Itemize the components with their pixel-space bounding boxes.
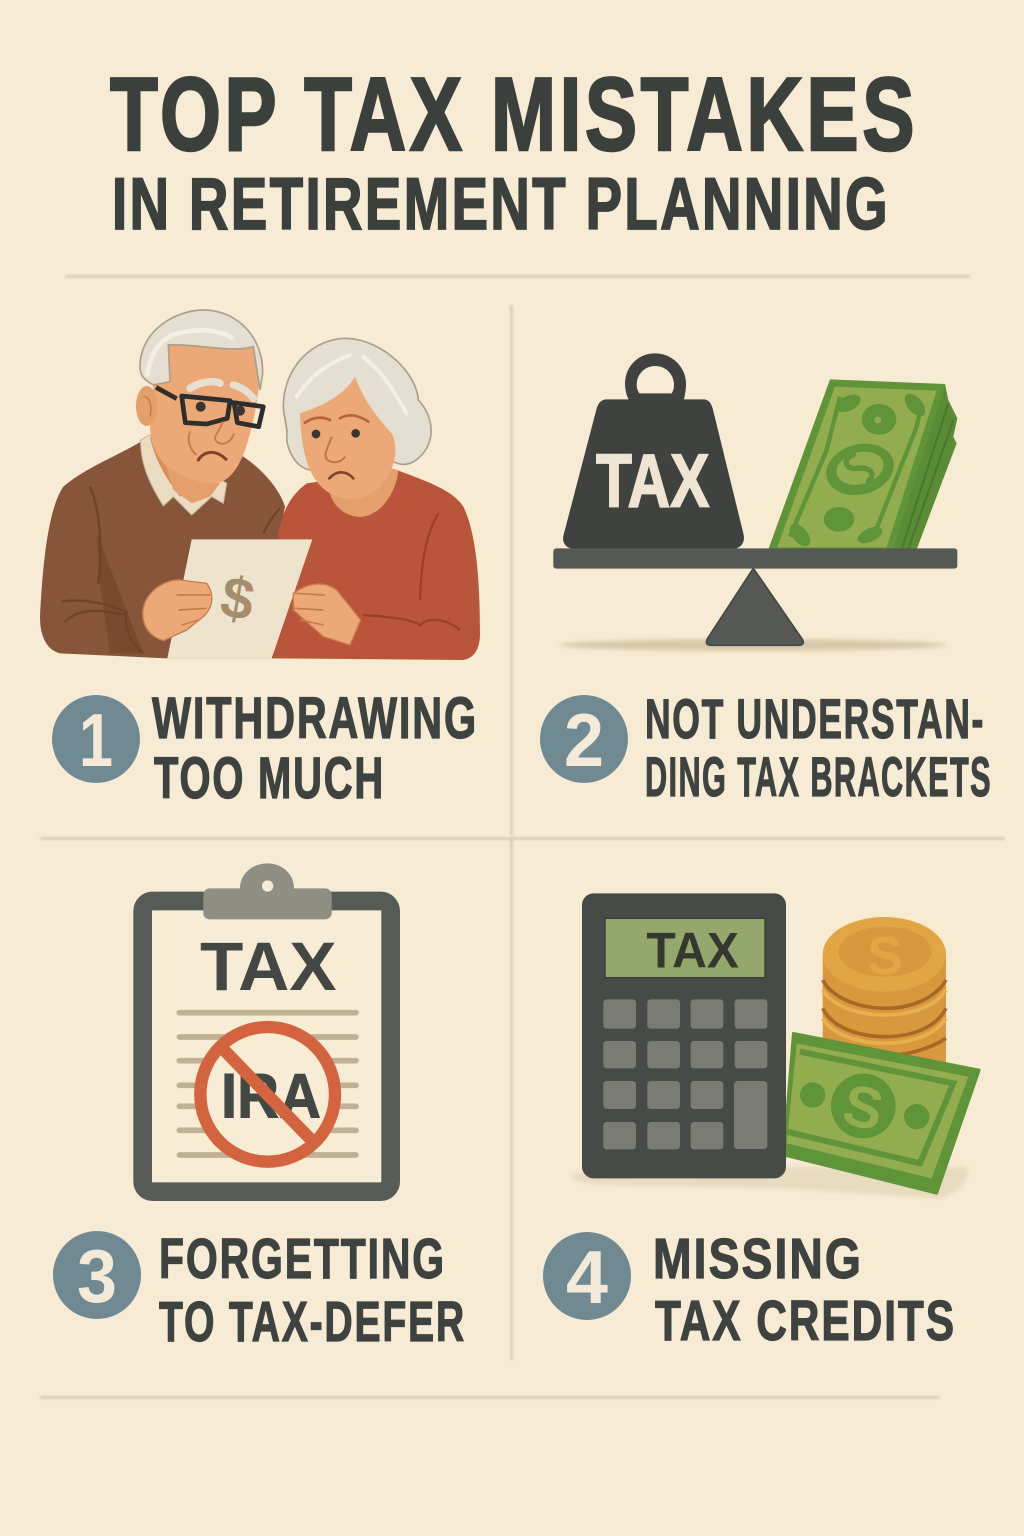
label 1: WITHDRAWING bbox=[152, 686, 478, 751]
man's glasses bbox=[156, 387, 263, 427]
label 1 bbox=[152, 686, 478, 811]
scale fulcrum bbox=[706, 568, 803, 645]
number badge 3 bbox=[53, 1231, 141, 1319]
text lines bbox=[179, 1013, 356, 1155]
panel: not understanding tax brackets bbox=[540, 353, 992, 808]
number badge 4: 4 bbox=[566, 1235, 608, 1319]
man's nose and frown bbox=[215, 422, 234, 444]
woman's hair strands bbox=[297, 355, 407, 413]
coin stack: S bbox=[867, 927, 903, 986]
prohibition circle interior bbox=[201, 1028, 334, 1161]
man's hand bbox=[143, 580, 212, 641]
clipboard board bbox=[143, 901, 391, 1192]
man's neck bbox=[150, 437, 197, 497]
coin stack bbox=[823, 917, 946, 1067]
label 3: FORGETTING bbox=[159, 1227, 446, 1291]
man's collar bbox=[141, 435, 227, 515]
weight body bbox=[563, 399, 744, 549]
calculator body bbox=[582, 893, 786, 1178]
label 2 bbox=[645, 687, 992, 808]
weight ring bbox=[625, 353, 686, 402]
woman's hair bbox=[283, 338, 431, 470]
label 3 bbox=[159, 1227, 466, 1354]
IRA text: IRA bbox=[221, 1062, 321, 1132]
money stack bbox=[887, 384, 957, 549]
illustration: calculator, coins and cash: TAX bbox=[646, 923, 739, 979]
money ornaments bbox=[790, 397, 922, 537]
label 4: MISSING bbox=[653, 1227, 863, 1291]
woman's head bbox=[300, 377, 395, 499]
illustration: tax weight vs money on scale bbox=[553, 353, 957, 651]
banknote bbox=[783, 1033, 979, 1193]
illustration: clipboard with crossed-out IRA bbox=[143, 863, 391, 1192]
weight label: TAX bbox=[596, 439, 709, 523]
illustration: worried couple with bill bbox=[40, 310, 480, 660]
prohibition sign bbox=[200, 1027, 335, 1162]
number badge 2 bbox=[540, 695, 628, 783]
woman's hand bbox=[293, 584, 361, 645]
panel: forgetting to tax-defer bbox=[53, 863, 466, 1354]
woman's sweater bbox=[273, 470, 480, 660]
woman's neck bbox=[330, 467, 398, 517]
calculator screen bbox=[605, 918, 765, 978]
label 4 bbox=[653, 1227, 956, 1353]
number badge 1 bbox=[52, 695, 140, 783]
ground shadow bbox=[570, 1167, 968, 1198]
man's eyebrows bbox=[190, 382, 253, 398]
illustration: worried couple with bill: $ bbox=[216, 564, 259, 634]
number badge 1: 1 bbox=[79, 698, 113, 782]
clipboard clip bbox=[203, 863, 332, 919]
calculator keys bbox=[603, 999, 767, 1149]
banknote: S bbox=[837, 1072, 889, 1144]
label 3: TO TAX-DEFER bbox=[159, 1290, 466, 1354]
illustration: calculator, coins and cash bbox=[570, 893, 979, 1198]
label 1: TOO MUCH bbox=[154, 746, 385, 811]
number badge 2: 2 bbox=[564, 698, 604, 782]
scale shadow bbox=[560, 639, 947, 651]
panel: withdrawing too much bbox=[40, 310, 480, 811]
man's sweater bbox=[40, 440, 285, 658]
number badge 3: 3 bbox=[77, 1234, 117, 1318]
man's head bbox=[150, 343, 259, 483]
clipboard heading: TAX bbox=[200, 929, 337, 1005]
title bbox=[110, 57, 918, 245]
bill with dollar sign bbox=[167, 539, 312, 658]
number badge 4 bbox=[543, 1232, 631, 1320]
woman's face bbox=[305, 415, 368, 423]
scale beam bbox=[553, 548, 957, 569]
panel: missing tax credits bbox=[543, 893, 979, 1353]
